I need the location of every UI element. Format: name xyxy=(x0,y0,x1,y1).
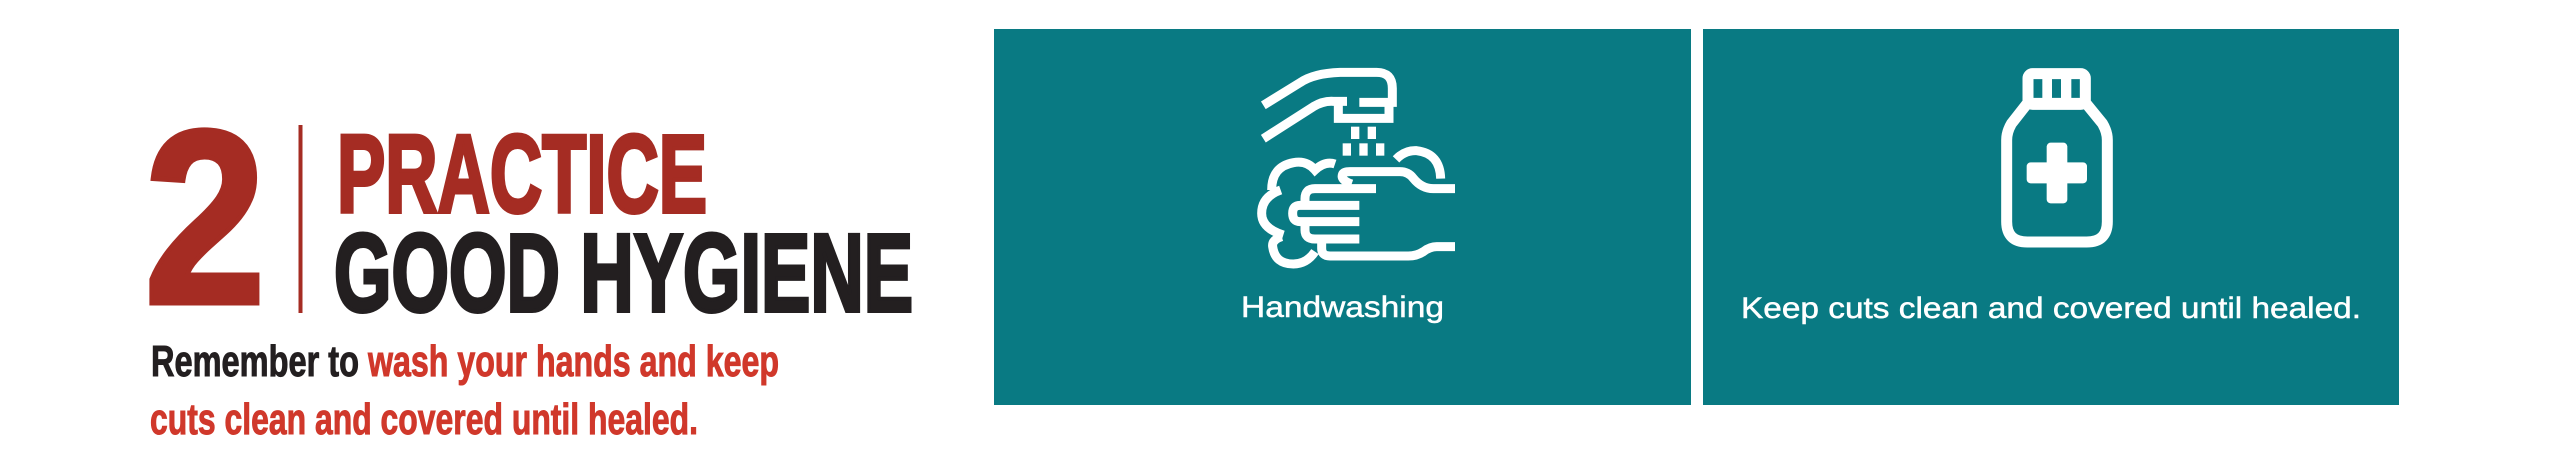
panel background xyxy=(994,29,1691,405)
body text: red second line: cuts clean and covered until healed. xyxy=(150,395,698,444)
icon: medicine bottle xyxy=(2001,68,2113,248)
panel: keep cuts clean xyxy=(1703,29,2399,405)
vertical rule xyxy=(298,125,302,313)
heading line: good hygiene: GOOD HYGIENE xyxy=(334,212,913,335)
section number 2: 2 xyxy=(144,78,266,356)
heading line: practice: PRACTICE xyxy=(337,113,707,236)
heading xyxy=(334,113,913,335)
panel label: keep cuts clean: Keep cuts clean and covered until healed. xyxy=(1741,292,2361,325)
body text xyxy=(150,337,779,444)
body text: lead-in: Remember to xyxy=(151,337,359,386)
panel label: handwashing: Handwashing xyxy=(1241,291,1444,324)
body text: red first line: wash your hands and keep xyxy=(367,337,779,386)
icon: hands under faucet xyxy=(1257,68,1455,268)
panel background xyxy=(1703,29,2399,405)
panel: handwashing xyxy=(994,29,1691,405)
